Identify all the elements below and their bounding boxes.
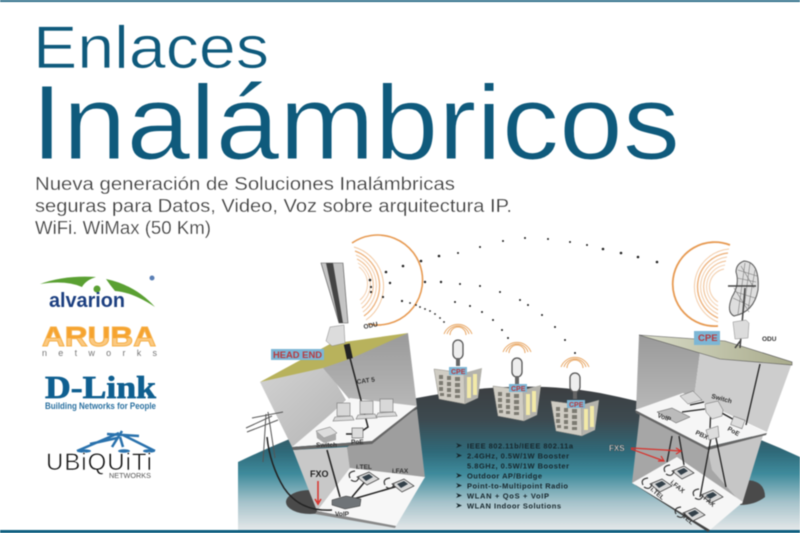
labels: ODU xyxy=(363,321,379,331)
switch xyxy=(316,427,337,443)
labels: ODU xyxy=(762,336,777,343)
panel: head end building xyxy=(260,321,425,528)
labels: Switch xyxy=(710,393,733,405)
title xyxy=(31,14,680,182)
top border stripe xyxy=(0,0,800,2)
subtitle text block xyxy=(35,174,512,238)
labels: i.FAX xyxy=(669,479,686,495)
title: Enlaces xyxy=(33,14,269,81)
panel: network diagram backdrop xyxy=(238,387,800,531)
logo: Aruba networks: ARUBA xyxy=(42,321,156,352)
CPE building 2: CPE xyxy=(511,386,526,393)
logo: Aruba networks: networks xyxy=(42,348,158,358)
CAT5 cable xyxy=(267,358,405,510)
feature list xyxy=(456,442,574,510)
logo: D-Link: D-Link xyxy=(45,369,156,405)
logo: D-Link: Building Networks for People xyxy=(45,401,156,412)
PoE xyxy=(352,428,363,438)
red arrow xyxy=(315,481,321,504)
i.TEL phone xyxy=(349,471,379,485)
CPE building 3: CPE xyxy=(569,402,584,409)
labels: Switch xyxy=(316,442,337,449)
upper floor xyxy=(635,393,767,447)
labels: PBX xyxy=(694,429,710,442)
feature list: Outdoor AP/Bridge xyxy=(467,472,542,480)
feature list: 5.8GHz, 0.5W/1W Booster xyxy=(467,462,569,470)
labels: PoE xyxy=(726,426,741,438)
devices xyxy=(657,408,690,423)
feature list: WLAN Indoor Solutions xyxy=(467,502,561,510)
labels: i.TEL xyxy=(356,464,372,471)
labels: PoE xyxy=(351,439,364,446)
ground shadow xyxy=(740,480,765,505)
labels: VoIP xyxy=(335,511,350,518)
logo: alvarion xyxy=(40,276,155,312)
cables xyxy=(667,364,760,497)
wireless link dots xyxy=(369,237,658,354)
panel: CPE building right xyxy=(609,335,792,532)
FXS label: FXS xyxy=(609,444,625,453)
icon: panel antenna and ODU xyxy=(321,263,353,359)
signal arcs: right CPE xyxy=(673,242,730,326)
label: CPE: CPE xyxy=(698,333,718,344)
labels: VoIP xyxy=(656,412,672,424)
labels: CAT 5 xyxy=(356,376,376,386)
title: Inalámbricos xyxy=(31,64,680,182)
subtitle text block: seguras para Datos, Video, Voz sobre arquitectura IP. xyxy=(35,196,512,216)
roof xyxy=(260,333,408,382)
i.FAX phone xyxy=(384,478,414,492)
phones xyxy=(642,478,672,492)
subtitle text block: Nueva generación de Soluciones Inalámbricas xyxy=(35,174,455,194)
PCs xyxy=(333,399,397,421)
labels: i.FAX xyxy=(392,468,409,475)
lower floor xyxy=(632,457,743,530)
logo: Ubiquiti Networks xyxy=(46,431,155,480)
VoIP device xyxy=(332,496,361,509)
roof xyxy=(639,335,792,365)
ground shadow xyxy=(286,490,334,514)
labels xyxy=(649,336,777,526)
lower floor xyxy=(317,468,425,526)
CPE building 3 xyxy=(551,357,599,436)
labels xyxy=(316,321,409,518)
CPE building 1 xyxy=(434,324,482,404)
labels: FAX xyxy=(702,495,716,509)
logo: Ubiquiti Networks: NETWORKS xyxy=(109,473,151,480)
upper floor xyxy=(292,398,417,447)
feature list: IEEE 802.11b/IEEE 802.11a xyxy=(467,442,574,450)
logo: alvarion: alvarion xyxy=(49,290,125,312)
subtitle text block: WiFi. WiMax (50 Km) xyxy=(35,218,211,238)
FXO label: FXO xyxy=(310,469,329,479)
feature list: WLAN + QoS + VoIP xyxy=(467,492,549,500)
logo: Ubiquiti Networks: UBiQUiTi xyxy=(46,449,152,476)
labels: i.TEL xyxy=(649,486,665,502)
CPE building 1: CPE xyxy=(451,369,466,376)
icon: grid dish antenna and ODU xyxy=(728,261,758,348)
label: CPE xyxy=(694,331,720,345)
CPE building 2 xyxy=(493,342,541,421)
signal arcs: head end xyxy=(352,235,423,325)
labels: TEL xyxy=(681,513,695,526)
feature list: Point-to-Multipoint Radio xyxy=(467,482,568,490)
feature list: 2.4GHz, 0.5W/1W Booster xyxy=(467,452,569,460)
icon: utility pole xyxy=(246,412,283,462)
bottom border stripe xyxy=(0,530,800,533)
label: HEAD END: HEAD END xyxy=(273,350,323,360)
red arrows xyxy=(631,448,681,461)
